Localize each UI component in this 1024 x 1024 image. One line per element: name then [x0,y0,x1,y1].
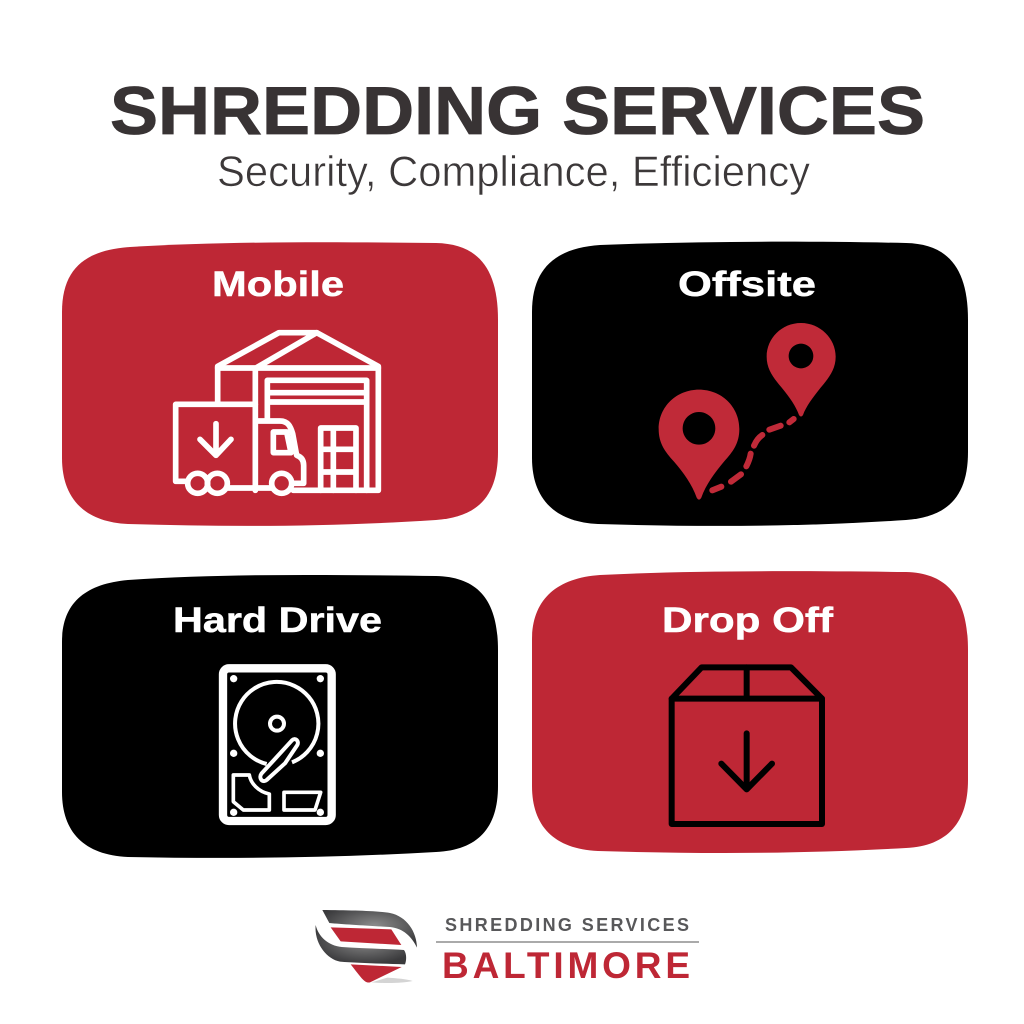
icon: box with arrow [672,667,822,824]
panel: mobile [62,242,498,526]
logo divider [436,941,699,943]
panel: drop off [532,571,968,853]
subtitle: Security, Compliance, Efficiency [217,148,810,196]
title: SHREDDING SERVICES [110,73,925,149]
logo [316,910,699,986]
heading: hard drive: Hard Drive [173,601,382,640]
icon: route pins [659,323,836,500]
heading: mobile: Mobile [212,265,344,304]
logo text: shredding services: SHREDDING SERVICES [445,915,689,935]
heading: offsite: Offsite [678,265,816,304]
heading: drop off: Drop Off [662,601,833,640]
icon: hard drive [223,668,332,821]
panel: offsite [532,242,968,526]
logo mark [316,910,417,983]
logo text: baltimore: BALTIMORE [442,945,690,986]
icon: truck and warehouse [176,333,378,493]
panel: hard drive [62,575,498,858]
